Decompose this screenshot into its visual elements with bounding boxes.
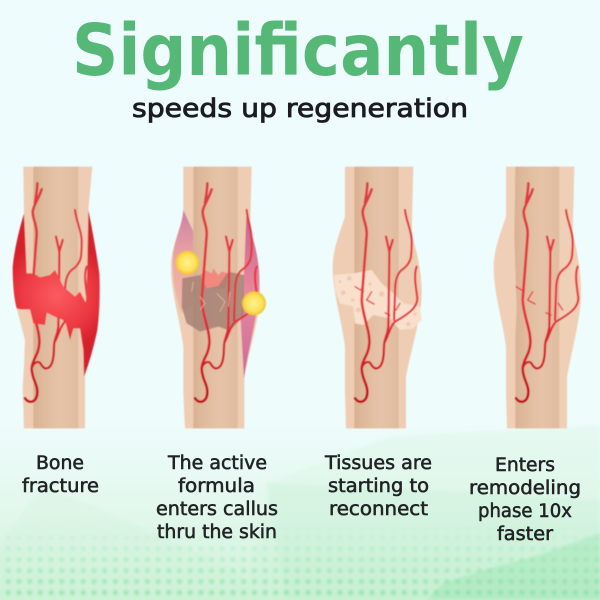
label: active formula: thru the skin <box>157 522 277 543</box>
label: remodeling phase: Enters <box>495 455 555 476</box>
bone band <box>33 167 78 428</box>
bone band <box>354 167 399 428</box>
callus cracks <box>192 282 230 312</box>
icon: yellow formula ball right <box>242 291 266 315</box>
label: active formula: enters callus <box>156 499 278 520</box>
label: active formula <box>156 453 278 543</box>
blood vessels <box>355 183 417 402</box>
label: tissues reconnect: Tissues are <box>324 453 432 474</box>
subtitle: speeds up regeneration <box>132 94 468 124</box>
label: tissues reconnect: reconnect <box>329 499 428 520</box>
red healing patch <box>200 268 228 288</box>
label: bone fracture <box>22 453 99 497</box>
panel: stage 2 active formula leg <box>171 167 266 428</box>
fracture bleed <box>13 210 100 377</box>
label: active formula: formula <box>178 476 255 497</box>
leg skin <box>171 167 260 428</box>
panel: stage 1 bone fracture leg <box>13 167 100 428</box>
blood vessels <box>516 183 578 402</box>
bone band <box>514 167 559 428</box>
label: active formula: The active <box>167 453 267 474</box>
label: remodeling phase: faster <box>497 524 553 545</box>
leg skin <box>17 167 92 428</box>
panel: stage 4 remodeling leg <box>494 167 581 428</box>
bone band <box>193 167 238 428</box>
panel: stage 3 tissues reconnect leg <box>333 167 422 428</box>
leg skin <box>333 167 422 428</box>
leg skin <box>494 167 581 428</box>
callus speckles <box>339 276 417 326</box>
label: bone fracture: fracture <box>22 476 99 497</box>
label: tissues reconnect <box>324 453 432 520</box>
pink muscle right <box>241 210 259 378</box>
icon: yellow formula ball left <box>175 251 199 275</box>
title: Significantly <box>72 9 524 92</box>
background with soft green base <box>0 426 600 600</box>
blood vessels <box>25 183 87 402</box>
label: remodeling phase: phase 10x <box>478 501 572 522</box>
pink muscle left <box>173 210 193 313</box>
label: bone fracture: Bone <box>36 453 84 474</box>
callus tissue patch <box>334 270 422 330</box>
label: tissues reconnect: starting to <box>328 476 429 497</box>
callus mass <box>182 272 244 332</box>
label: remodeling phase: remodeling <box>469 478 581 499</box>
blood vessels <box>195 183 257 402</box>
label: remodeling phase <box>469 455 581 545</box>
